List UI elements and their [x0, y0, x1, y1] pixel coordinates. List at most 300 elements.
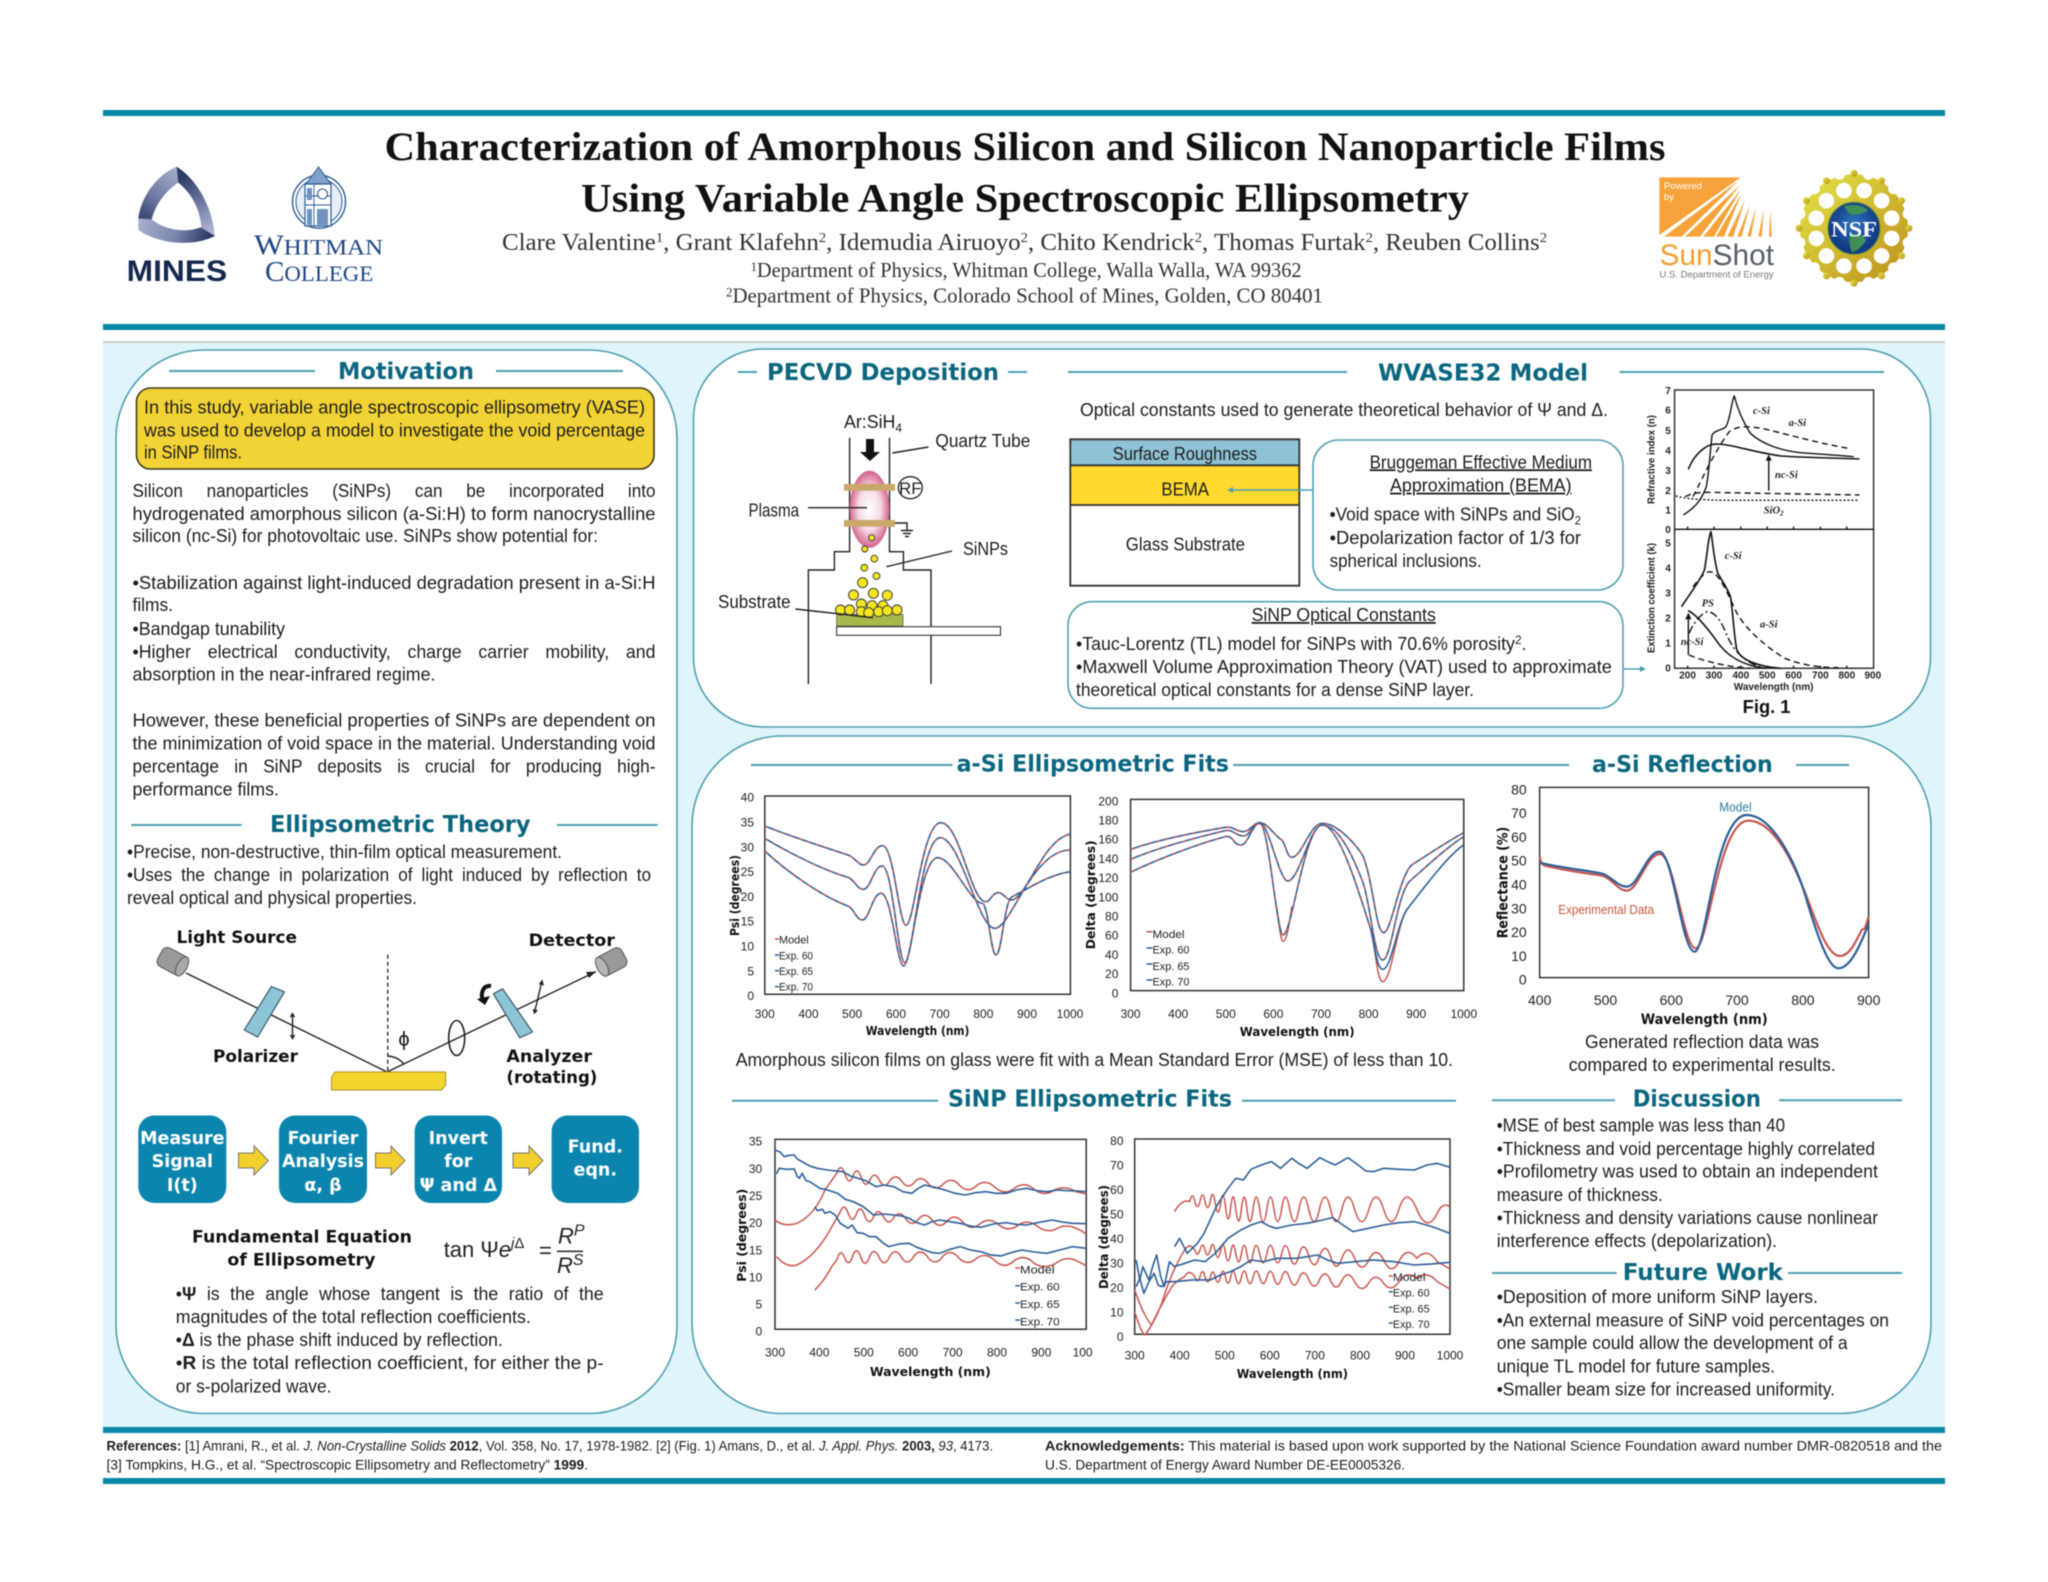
affiliation 2: Department of Physics, Colorado School of Mines, Golden, CO 80401 [732, 284, 1323, 308]
text: motivation body: absorption in the near-infrared regime. [132, 665, 436, 685]
diagram: layer stack: Surface Roughness [1113, 444, 1257, 464]
authors: 1 [656, 231, 663, 246]
section: Discussion: Discussion [1633, 1087, 1761, 1113]
legend: Exp. 60 [779, 950, 813, 962]
header divider [103, 341, 1945, 343]
chart: a-Si reflection: 600 [1660, 992, 1683, 1008]
authors: 2 [1021, 231, 1028, 246]
text: motivation body [132, 481, 656, 799]
section: Discussion: •Thickness and void percentage highly correlated [1497, 1139, 1875, 1159]
section: Future Work: one sample could allow the development of a [1497, 1333, 1849, 1353]
box: SiNP optical constants: •Maxwell Volume Approximation Theory (VAT) used to approximate [1076, 657, 1612, 677]
legend [1146, 929, 1190, 989]
icon: light source [155, 945, 191, 978]
chart: figure 1 optical constants: 4 [1665, 446, 1671, 457]
chart: figure 1 optical constants: 3 [1665, 589, 1671, 600]
chart: figure 1 optical constants [1647, 386, 1882, 717]
chart: figure 1 optical constants: 5 [1665, 426, 1671, 437]
callout: study summary: was used to develop a model to investigate the void percentage [143, 420, 645, 440]
chart: figure 1 optical constants: 1 [1665, 505, 1671, 516]
chart: figure 1 optical constants: c-Si [1753, 406, 1770, 417]
equation: S [573, 1252, 584, 1269]
logo: NSF [1794, 169, 1914, 288]
chart: a-Si reflection: 700 [1725, 992, 1749, 1008]
chart: a-Si Psi: 900 [1017, 1007, 1037, 1021]
section: Discussion: interference effects (depolarization). [1497, 1231, 1777, 1251]
chart: a-Si Psi: Psi (degrees) [728, 855, 742, 936]
chart: a-Si reflection: 10 [1511, 948, 1527, 964]
logo: SunShot: Powered [1664, 181, 1702, 192]
chart: a-Si Delta: 200 [1098, 794, 1119, 808]
affiliation 1: 1 [751, 259, 757, 274]
title line 2: Using Variable Angle Spectroscopic Ellipsometry [581, 176, 1469, 220]
legend: Exp. 60 [1020, 1282, 1060, 1294]
authors: 2 [1366, 231, 1373, 246]
logo: Whitman College: WHITMAN [254, 230, 383, 261]
text: equation definitions: •Δ is the phase shift induced by reflection. [176, 1330, 503, 1350]
diagram: ellipsometer: ϕ [398, 1029, 410, 1051]
footer: references: [3] Tompkins, H.G., et al. “Spectroscopic Ellipsometry and Reflectometry” 1999. [106, 1456, 588, 1472]
heading: PECVD Deposition: PECVD Deposition [767, 360, 999, 386]
electrodes [844, 484, 895, 491]
text: motivation body: the minimization of void space in the material. Understanding void [132, 734, 656, 754]
chamber labels: 4 [895, 421, 902, 435]
equation [444, 1223, 585, 1278]
panel: left column [116, 350, 677, 1414]
text: equation definitions [176, 1284, 604, 1396]
chart: figure 1 optical constants: 5 [1665, 538, 1671, 549]
equation: j [509, 1235, 515, 1252]
logo: SunShot: U.S. Department of Energy [1660, 269, 1774, 279]
section: Future Work [1492, 1260, 1902, 1400]
header bottom bar [103, 324, 1945, 330]
box: SiNP optical constants [1068, 602, 1623, 708]
chart: SiNP Psi: 35 [749, 1135, 763, 1149]
chart: figure 1 optical constants: PS [1702, 599, 1714, 610]
flow chart [138, 1116, 639, 1203]
heading: SiNP Ellipsometric Fits: SiNP Ellipsometric Fits [948, 1087, 1232, 1113]
text: motivation body: silicon (nc-Si) for photovoltaic use. SiNPs show potential for: [132, 526, 598, 546]
section: Future Work: Future Work [1623, 1260, 1784, 1286]
chart: figure 1 optical constants: 2 [1665, 614, 1671, 625]
text: motivation body: percentage in SiNP deposits is crucial for producing high- [132, 756, 656, 776]
text: equation definitions: •R is the total reflection coefficient, for either the p- [176, 1353, 604, 1373]
chart: SiNP Delta: 0 [1117, 1330, 1124, 1344]
footer: references: References: [1] Amrani, R., et al. J. Non-Crystalline Solids 2012, Vol. 358, No. 17, 1978-1982. [2] (Fig. 1) Amans, D., et al. J. Appl. Phys. 2003, 93, 4173. [106, 1438, 993, 1454]
page background band [103, 343, 1945, 1428]
text: equation definitions: or s-polarized wave. [176, 1376, 332, 1396]
chart: a-Si reflection: 60 [1511, 829, 1527, 845]
chart: a-Si reflection: Wavelength (nm) [1641, 1012, 1768, 1028]
chart: a-Si Psi: 700 [930, 1007, 950, 1021]
equation: R [557, 1253, 573, 1278]
box: SiNP optical constants: theoretical optical constants for a dense SiNP layer. [1076, 680, 1474, 700]
diagram: layer stack [1070, 439, 1299, 586]
chart: a-Si Delta: Wavelength (nm) [1240, 1025, 1355, 1039]
icon: polarizer [244, 986, 284, 1037]
logo: Whitman College: COLLEGE [265, 257, 373, 288]
RF source [898, 477, 922, 499]
text: reflection caption: compared to experimental results. [1569, 1055, 1836, 1075]
legend: Exp. 60 [1152, 945, 1190, 957]
box: BEMA description: •Void space with SiNPs and SiO [1330, 505, 1586, 525]
heading: fundamental equation: of Ellipsometry [227, 1250, 375, 1270]
text: motivation body: films. [132, 595, 173, 615]
chart: a-Si Delta: 700 [1311, 1007, 1331, 1021]
diagram: layer stack: Glass Substrate [1126, 535, 1245, 555]
chart: SiNP Delta: 10 [1110, 1305, 1124, 1319]
box: BEMA description: Approximation (BEMA) [1390, 476, 1572, 496]
chart: a-Si Psi [728, 791, 1084, 1038]
legend [1015, 1264, 1060, 1328]
chart: SiNP Delta: 80 [1110, 1134, 1124, 1148]
chart: SiNP Delta: Delta (degrees) [1097, 1185, 1111, 1289]
logo: NSF: NSF [1831, 216, 1877, 241]
chart: figure 1 optical constants: Extinction coefficient (k) [1647, 543, 1658, 653]
section: Future Work: •Deposition of more uniform SiNP layers. [1497, 1287, 1818, 1307]
icon: gas flow arrow [860, 439, 880, 461]
text: motivation body: Silicon nanoparticles (SiNPs) can be incorporated into [132, 481, 656, 501]
text: theory intro: •Precise, non-destructive, thin-film optical measurement. [127, 842, 562, 862]
step: measure signal [138, 1116, 226, 1203]
chart: SiNP Delta: 20 [1110, 1281, 1124, 1295]
legend: Model [1393, 1272, 1426, 1284]
text: motivation body: •Bandgap tunability [132, 619, 285, 639]
chart: a-Si Delta: 600 [1263, 1007, 1284, 1021]
icon: sample [332, 1072, 446, 1090]
chart: figure 1 optical constants: Wavelength (nm) [1734, 682, 1814, 693]
step: measure signal: I(t) [167, 1176, 198, 1196]
diagram: ellipsometer [155, 928, 629, 1090]
caption: Fig. 1: Fig. 1 [1743, 697, 1790, 717]
diagram: ellipsometer: Detector [529, 931, 616, 951]
authors: , Idemudia Airuoyo [826, 230, 1021, 256]
chart: SiNP Delta: 50 [1110, 1207, 1124, 1221]
chart: SiNP Delta: 600 [1260, 1348, 1280, 1362]
heading: a-Si Reflection: a-Si Reflection [1592, 752, 1773, 778]
text: theory intro: reveal optical and physical properties. [127, 888, 417, 908]
chart: SiNP Psi: 0 [756, 1325, 763, 1339]
logo: SunShot [1659, 177, 1775, 279]
authors: 2 [1540, 231, 1547, 246]
chart: SiNP Delta [1097, 1134, 1464, 1381]
arrow: BEMA [1227, 487, 1312, 493]
diagram labels: Light Source [176, 928, 297, 948]
chart: a-Si Psi: 500 [842, 1007, 863, 1021]
chart: a-Si reflection: Experimental Data [1558, 903, 1654, 917]
chart: SiNP Delta: 60 [1110, 1183, 1124, 1197]
substrate [837, 614, 903, 626]
chart: SiNP Psi: 900 [1031, 1346, 1052, 1360]
step: invert: Ψ and Δ [420, 1176, 497, 1196]
text: theory intro: •Uses the change in polarization of light induced by reflection to [127, 865, 651, 885]
text: motivation body: However, these beneficial properties of SiNPs are dependent on [132, 710, 656, 730]
chart: a-Si reflection: 400 [1528, 992, 1552, 1008]
chamber labels: Ar:SiH [844, 412, 896, 432]
legend [1389, 1272, 1430, 1331]
footer: acknowledgements: U.S. Department of Energy Award Number DE-EE0005326. [1045, 1456, 1405, 1472]
step: measure signal: Signal [152, 1152, 213, 1172]
diagram: PECVD chamber: Plasma [748, 501, 800, 521]
chart: figure 1 optical constants: 2 [1779, 509, 1784, 517]
chart: a-Si Delta: Delta (degrees) [1084, 840, 1098, 949]
chart: a-Si Psi: 5 [747, 964, 754, 978]
chart: a-Si Delta: 120 [1098, 871, 1119, 885]
diagram: PECVD chamber: Quartz Tube [935, 431, 1030, 451]
chart: SiNP Delta: 400 [1170, 1348, 1190, 1362]
text: reflection caption: Generated reflection data was [1585, 1032, 1819, 1052]
chart: SiNP Psi [735, 1135, 1093, 1379]
chart: figure 1 optical constants: 6 [1665, 405, 1671, 416]
chart: SiNP Psi: 5 [756, 1298, 763, 1312]
chart: a-Si Psi: 30 [741, 840, 754, 854]
text: a-Si fit summary: Amorphous silicon films on glass were fit with a Mean Standard Error (MSE) of less than 10. [736, 1050, 1453, 1070]
authors: 2 [819, 231, 826, 246]
section: Discussion: •Thickness and density variations cause nonlinear [1497, 1208, 1878, 1228]
chart: a-Si Delta: 80 [1105, 910, 1119, 924]
chart: a-Si reflection: 40 [1511, 876, 1527, 892]
chart: SiNP Delta: 500 [1215, 1348, 1235, 1362]
chart: a-Si Psi: 20 [741, 890, 754, 904]
legend: Exp. 70 [1020, 1316, 1060, 1328]
chart: figure 1 optical constants: 0 [1665, 664, 1671, 675]
chart: a-Si reflection: 20 [1511, 924, 1527, 940]
title block [384, 124, 1666, 308]
section: Future Work: unique TL model for future samples. [1497, 1357, 1775, 1377]
arrow [513, 1146, 543, 1175]
section: Discussion: •MSE of best sample was less than 40 [1497, 1116, 1785, 1136]
diagram: layer stack: BEMA [1161, 480, 1209, 500]
chart: SiNP Psi: Psi (degrees) [735, 1189, 749, 1282]
arrow [238, 1146, 268, 1175]
step: fundamental equation: eqn. [574, 1160, 617, 1180]
chart: SiNP Delta: 30 [1110, 1256, 1124, 1270]
equation: R [558, 1224, 574, 1249]
chart: figure 1 optical constants: SiO [1764, 505, 1780, 516]
footer: references [106, 1438, 993, 1472]
chart: a-Si Delta: 160 [1098, 833, 1119, 847]
footer top bar [103, 1427, 1945, 1433]
chart: figure 1 optical constants: 200 [1679, 670, 1696, 681]
chart: SiNP Delta: 900 [1395, 1348, 1415, 1362]
logo: SunShot: SunShot [1660, 239, 1775, 272]
chart: a-Si Psi: Wavelength (nm) [866, 1024, 969, 1038]
chart: SiNP Psi: 30 [749, 1162, 763, 1176]
chart: SiNP Psi: 300 [765, 1346, 785, 1360]
chart: SiNP Psi: 800 [987, 1346, 1007, 1360]
chart: a-Si reflection: Reflectance (%) [1496, 827, 1512, 938]
step: fundamental equation [552, 1116, 639, 1203]
diagram: ellipsometer: Analyzer [506, 1047, 593, 1067]
box: BEMA description: spherical inclusions. [1330, 551, 1482, 571]
step: invert: Invert [429, 1129, 488, 1149]
plasma [850, 471, 890, 548]
footer: acknowledgements [1045, 1438, 1942, 1472]
text: motivation body: •Higher electrical conductivity, charge carrier mobility, and [132, 642, 656, 662]
chart: figure 1 optical constants: 300 [1706, 670, 1723, 681]
chart: SiNP Psi: 100 [1073, 1346, 1093, 1360]
step: fourier analysis [279, 1116, 367, 1203]
chart: a-Si Psi: 1000 [1057, 1007, 1084, 1021]
chart: a-Si Psi: 35 [741, 816, 754, 830]
box: SiNP optical constants: SiNP Optical Constants [1252, 605, 1436, 625]
step: fourier analysis: Fourier [288, 1129, 359, 1149]
step: invert: for [444, 1152, 473, 1172]
chart: a-Si reflection: 800 [1791, 992, 1815, 1008]
legend: Exp. 65 [1152, 961, 1190, 973]
legend: Exp. 65 [1020, 1299, 1060, 1311]
chart: a-Si Delta: 140 [1098, 852, 1119, 866]
chart: SiNP Psi: Wavelength (nm) [870, 1365, 991, 1379]
chart: SiNP Psi: 700 [943, 1346, 963, 1360]
legend: Exp. 65 [779, 966, 813, 978]
chart: a-Si Psi: 0 [747, 989, 754, 1003]
chart: a-Si Delta [1084, 794, 1477, 1039]
chart: figure 1 optical constants: a-Si [1760, 619, 1778, 630]
equation: P [574, 1223, 585, 1240]
step: invert [415, 1116, 502, 1203]
chart: a-Si Delta: 20 [1105, 967, 1119, 981]
chart: SiNP Delta: 40 [1110, 1232, 1124, 1246]
heading: a-Si Ellipsometric Fits: a-Si Ellipsometric Fits [957, 752, 1229, 778]
text: motivation body: performance films. [132, 779, 279, 799]
step: fundamental equation: Fund. [568, 1138, 623, 1158]
text: optical constants intro: Optical constants used to generate theoretical behavior of Ψ and Δ. [1080, 400, 1608, 420]
chart: SiNP Psi: 10 [749, 1270, 763, 1284]
chart: SiNP Delta: 1000 [1437, 1348, 1464, 1362]
chart: a-Si Delta: 0 [1112, 986, 1119, 1000]
chart: figure 1 optical constants: Refractive index (n) [1647, 415, 1658, 504]
box: BEMA description [1313, 440, 1623, 590]
chart: SiNP Delta: Wavelength (nm) [1237, 1367, 1348, 1381]
arrow [376, 1146, 405, 1175]
text: motivation body: hydrogenated amorphous silicon (a-Si:H) to form nanocrystalline [132, 504, 656, 524]
icon: rotation arrow [482, 986, 491, 1002]
chart: SiNP Psi: 25 [749, 1189, 763, 1203]
section: Future Work: •Smaller beam size for increased uniformity. [1497, 1380, 1835, 1400]
legend: Exp. 60 [1393, 1288, 1430, 1300]
authors: , Chito Kendrick [1028, 230, 1195, 256]
logo: SunShot: by [1664, 192, 1674, 203]
chart: figure 1 optical constants: a-Si [1789, 418, 1806, 429]
chart: figure 1 optical constants: 1 [1665, 639, 1671, 650]
chart: figure 1 optical constants: 900 [1864, 670, 1882, 681]
diagram: PECVD chamber: SiNPs [963, 539, 1008, 559]
chart: SiNP Delta: 70 [1110, 1158, 1124, 1172]
chart: figure 1 optical constants: nc-Si [1775, 470, 1798, 481]
footer: acknowledgements: Acknowledgements: This material is based upon work supported by the National Science Foundation award number DMR-0820518 and the [1045, 1438, 1942, 1454]
chart: figure 1 optical constants: 500 [1759, 670, 1776, 681]
chart: a-Si Delta: 40 [1105, 948, 1119, 962]
authors: , Reuben Collins [1373, 230, 1540, 256]
authors: , Thomas Furtak [1202, 230, 1366, 256]
chart: a-Si reflection [1496, 781, 1881, 1028]
legend: Exp. 70 [779, 982, 813, 994]
box: SiNP optical constants: 2 [1515, 633, 1522, 647]
footer bottom bar [103, 1478, 1945, 1484]
heading: fundamental equation [192, 1228, 412, 1270]
legend: Exp. 65 [1393, 1303, 1430, 1315]
chart: figure 1 optical constants: 0 [1665, 525, 1671, 536]
box: BEMA description: 2 [1575, 514, 1581, 528]
chart: figure 1 optical constants: 400 [1732, 670, 1750, 681]
logo: Mines: MINES [127, 255, 227, 288]
chart: figure 1 optical constants: 4 [1665, 564, 1671, 575]
diagram: PECVD chamber: RF [899, 479, 922, 498]
chart: figure 1 optical constants: 700 [1812, 670, 1829, 681]
chart: a-Si reflection: 80 [1511, 781, 1527, 797]
chart: a-Si Psi: 300 [755, 1007, 775, 1021]
header top bar [103, 110, 1945, 116]
title line 1: Characterization of Amorphous Silicon and Silicon Nanoparticle Films [384, 124, 1666, 169]
step: fourier analysis: Analysis [282, 1152, 364, 1172]
chart: figure 1 optical constants: c-Si [1725, 551, 1742, 562]
chart: a-Si Psi: 15 [741, 915, 754, 929]
diagram: PECVD chamber: Substrate [718, 592, 791, 612]
section: Discussion [1492, 1087, 1902, 1251]
chart: a-Si Delta: 900 [1406, 1007, 1427, 1021]
chart: a-Si Delta: 1000 [1450, 1007, 1477, 1021]
heading: WVASE32 Model: WVASE32 Model [1378, 361, 1588, 387]
chart: a-Si Psi: 10 [741, 940, 754, 954]
icon: detector [593, 946, 629, 978]
chart: a-Si reflection: 0 [1519, 972, 1527, 988]
section: Discussion: measure of thickness. [1497, 1185, 1663, 1205]
chart: figure 1 optical constants: nc-Si [1681, 637, 1704, 648]
panel: results [692, 736, 1931, 1414]
chart: a-Si reflection: 900 [1857, 992, 1881, 1008]
equation: Δ [514, 1235, 524, 1252]
chart: SiNP Psi: 400 [809, 1346, 830, 1360]
leader lines [795, 447, 952, 618]
chart: SiNP Delta: 700 [1305, 1348, 1325, 1362]
nanoparticles [836, 535, 902, 618]
chart: a-Si reflection: Model [1719, 801, 1752, 815]
chart: a-Si reflection: 50 [1511, 853, 1527, 869]
chart: a-Si Psi: 40 [741, 791, 754, 805]
chart: a-Si Delta: 300 [1121, 1007, 1141, 1021]
logo: Whitman College [254, 167, 383, 288]
legend: Model [1152, 929, 1184, 941]
chart: a-Si reflection: 30 [1511, 900, 1527, 916]
equation: tan Ψe [444, 1237, 511, 1262]
chart: a-Si Psi: 25 [741, 865, 754, 879]
chart: figure 1 optical constants: 7 [1665, 386, 1671, 397]
legend: Model [1020, 1264, 1055, 1276]
authors: , Grant Klafehn [663, 230, 819, 256]
panel: deposition and model [694, 349, 1930, 727]
arrow: to figure 1 [1624, 666, 1646, 672]
chart: a-Si Delta: 180 [1098, 814, 1119, 828]
heading: Motivation: Motivation [338, 359, 474, 385]
chart: SiNP Psi: 20 [749, 1216, 763, 1230]
text: theory intro [127, 842, 651, 908]
icon: analyzer [493, 989, 532, 1038]
text: motivation body: •Stabilization against light-induced degradation present in a-Si:H [132, 573, 656, 593]
icon: polarization arrows [290, 981, 543, 1038]
callout: study summary [136, 388, 654, 469]
chart: SiNP Delta: 300 [1125, 1348, 1145, 1362]
box: SiNP optical constants: . [1522, 634, 1526, 654]
legend: Exp. 70 [1393, 1319, 1430, 1331]
chart: a-Si Delta: 500 [1216, 1007, 1236, 1021]
beams [186, 972, 596, 1072]
authors: 2 [1195, 231, 1202, 246]
text: reflection caption [1569, 1032, 1836, 1075]
chart: figure 1 optical constants: 2 [1665, 486, 1671, 497]
chart: a-Si Psi: 600 [886, 1007, 906, 1021]
chart: SiNP Psi: 600 [898, 1346, 919, 1360]
